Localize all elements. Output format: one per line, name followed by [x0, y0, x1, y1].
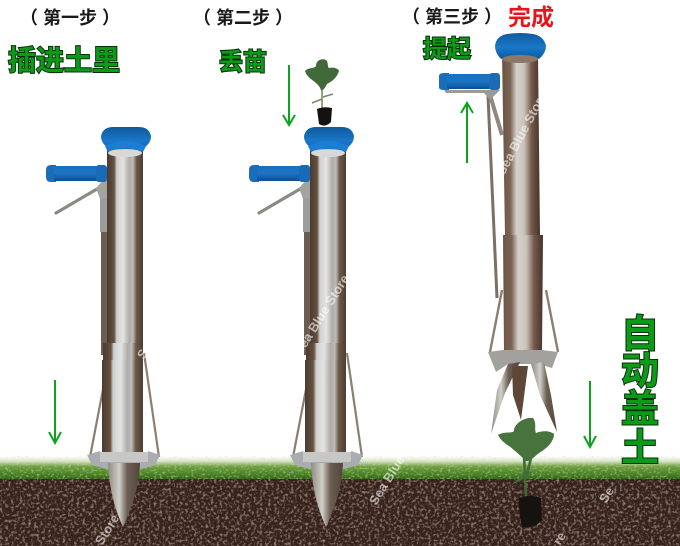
watermarks: [92, 89, 617, 546]
step 1 label: 插进土里: [8, 45, 120, 76]
watermarks: Sea Blue Store: [493, 89, 550, 177]
vertical label: automatic soil cover: 土: [621, 428, 659, 470]
arrow: step 2 down: [283, 65, 295, 125]
arrow: step 3 up: [461, 103, 473, 163]
step 1 heading: （ 第一步 ）: [20, 7, 120, 28]
step 3 heading: （ 第三步 ）: [402, 6, 502, 27]
vertical label: automatic soil cover: 自: [621, 314, 659, 356]
vertical label: automatic soil cover: [621, 314, 659, 470]
step 2 heading: （ 第二步 ）: [193, 7, 293, 28]
watermarks: Se: [596, 484, 617, 506]
vertical label: automatic soil cover: 动: [621, 351, 659, 393]
grass strip: [0, 456, 680, 481]
arrow: automatic cover down: [584, 381, 596, 447]
soil: [0, 479, 680, 546]
icon: seedling above tube: [305, 59, 339, 126]
tool: step 1 transplanter: [46, 127, 160, 527]
arrow: step 1 down: [49, 380, 61, 443]
watermarks: Sea Blue: [366, 453, 408, 508]
watermarks: Sea Blue Store: [291, 272, 352, 358]
step 3 completion text: 完成: [508, 4, 554, 30]
icon: planted seedling with root ball: [498, 418, 554, 527]
watermarks: Sea Blue Store: [134, 276, 195, 362]
vertical label: automatic soil cover: 盖: [621, 389, 659, 431]
tool: lifted transplanter: [439, 33, 558, 434]
tool: step 2 transplanter: [249, 127, 363, 527]
step 3 label: 提起: [423, 36, 471, 63]
step 2 label: 丢苗: [219, 49, 267, 76]
